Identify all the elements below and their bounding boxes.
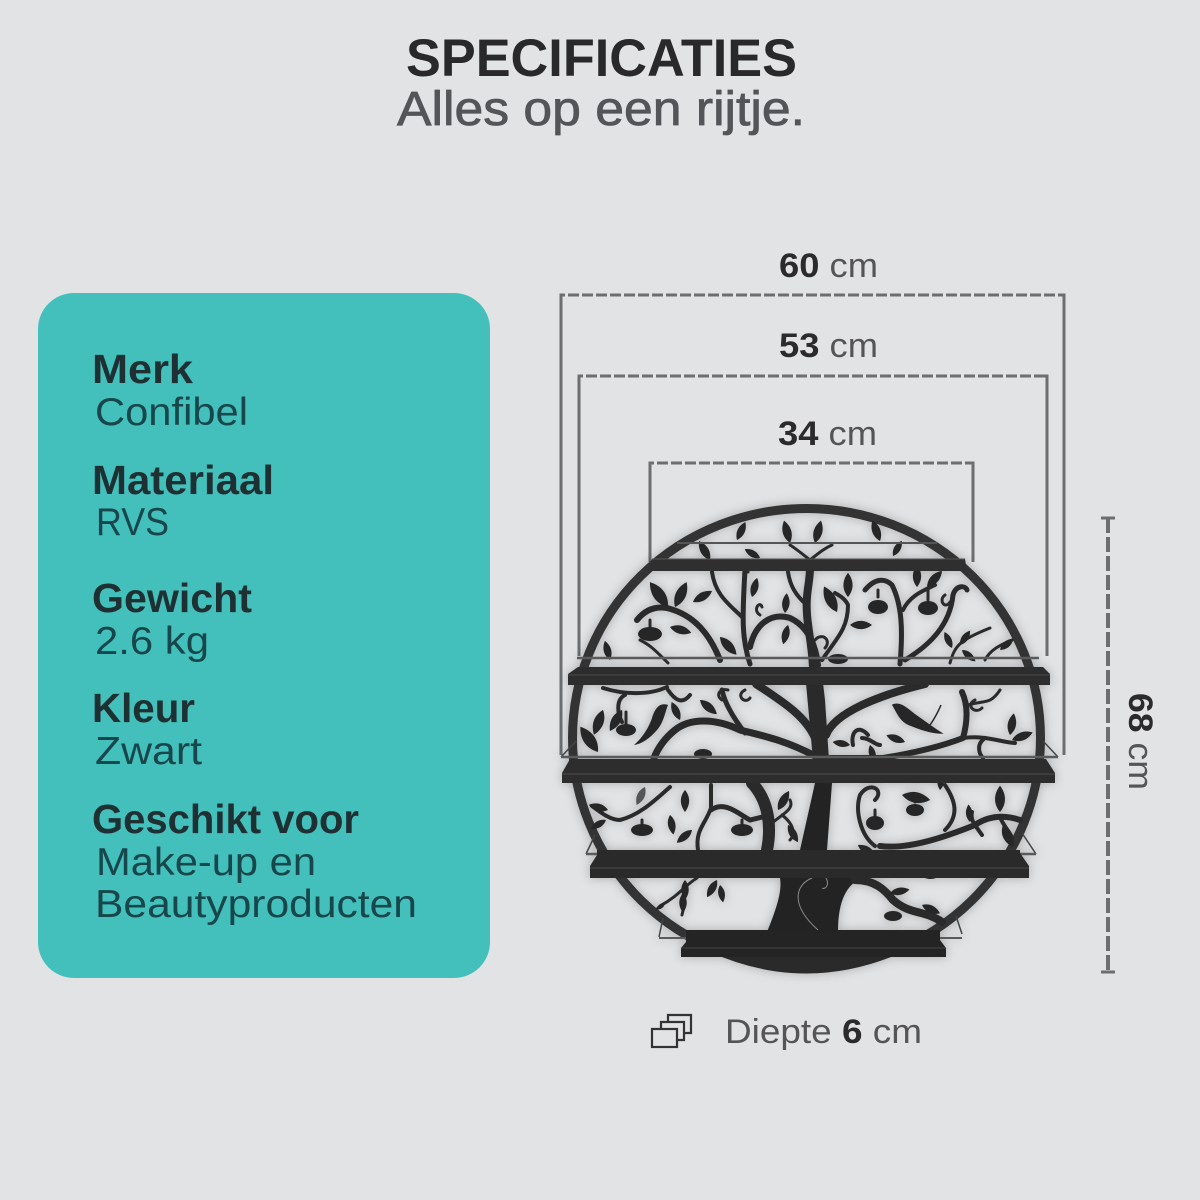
spec: Materiaal: RVS xyxy=(96,501,169,544)
dimension frame: 34 cm: 34 cm xyxy=(778,415,877,453)
spec: Materiaal: Materiaal xyxy=(92,457,274,503)
spec: Geschikt voor: Geschikt voor xyxy=(92,796,359,842)
spec: Gewicht: Gewicht xyxy=(92,575,252,621)
spec: Merk xyxy=(92,346,248,434)
dimension: height 68 cm: 68 cm xyxy=(1121,693,1159,790)
dimension: height 68 cm xyxy=(1101,518,1159,972)
crescent detail on trunk xyxy=(798,878,827,930)
spec: Geschikt voor: Make-up en xyxy=(96,841,316,884)
tree trunk and branches xyxy=(592,545,1020,932)
panel: specifications xyxy=(38,293,490,978)
shelf 5 xyxy=(659,916,962,957)
shelf 1 xyxy=(648,543,967,571)
subtitle: Alles op een rijtje. xyxy=(397,83,805,136)
depth label: Diepte 6 cm xyxy=(725,1013,922,1051)
wall shelf: tree of life xyxy=(561,508,1058,974)
spec: Geschikt voor xyxy=(92,796,417,926)
spec: Merk: Confibel xyxy=(95,391,248,434)
dimension frame: 53 cm xyxy=(579,327,1047,656)
spec: Geschikt voor: Beautyproducten xyxy=(95,883,417,926)
spec: Materiaal xyxy=(92,457,274,544)
spec: Gewicht: 2.6 kg xyxy=(95,620,209,663)
dimension frame: 60 cm: 60 cm xyxy=(779,247,878,285)
bird: right xyxy=(893,704,941,733)
title: SPECIFICATIES xyxy=(406,29,797,88)
dimension frame: 53 cm: 53 cm xyxy=(779,327,878,365)
leaves and fruit xyxy=(576,519,1034,921)
spec: Kleur: Zwart xyxy=(95,730,202,773)
dimension frame: 34 cm xyxy=(650,415,973,562)
shelf 2 xyxy=(568,658,1050,685)
spec: Kleur xyxy=(92,685,202,773)
icon: depth layers xyxy=(652,1015,691,1047)
circular frame xyxy=(572,508,1040,974)
dimension frame: 60 cm xyxy=(561,247,1064,755)
spec: Kleur: Kleur xyxy=(92,685,195,731)
shelf 3 xyxy=(561,741,1058,783)
bird: left xyxy=(634,704,668,745)
shelf 4 xyxy=(586,833,1036,878)
spec: Gewicht xyxy=(92,575,252,663)
spec: Merk: Merk xyxy=(92,346,193,392)
